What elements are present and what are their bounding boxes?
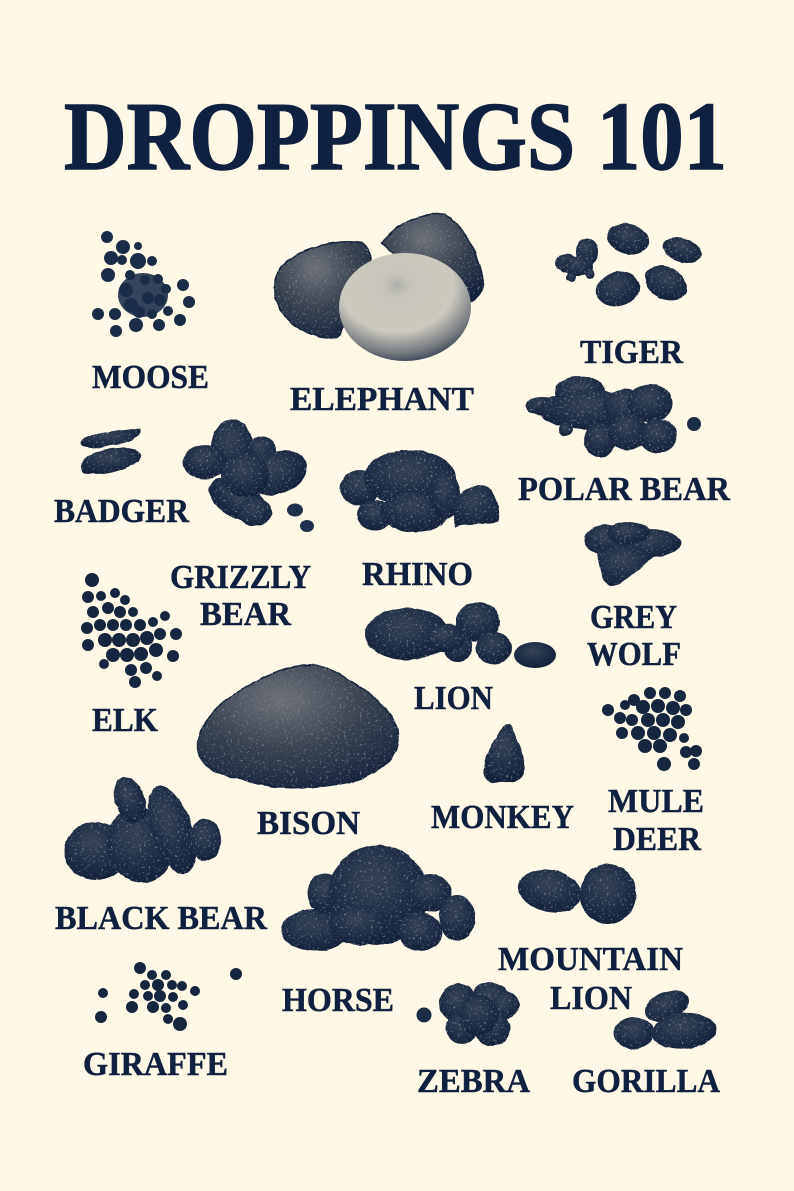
rhino label: RHINO xyxy=(362,556,473,593)
lion label: LION xyxy=(414,680,493,717)
elk label: ELK xyxy=(92,702,158,739)
polar bear droppings xyxy=(525,376,701,457)
grey wolf label: WOLF xyxy=(587,636,681,673)
zebra label: ZEBRA xyxy=(417,1063,530,1100)
monkey label: MONKEY xyxy=(431,799,574,836)
elephant droppings xyxy=(274,214,483,361)
mountain lion label xyxy=(498,941,683,1017)
giraffe label: GIRAFFE xyxy=(83,1046,228,1083)
bison droppings xyxy=(197,665,399,788)
bison label: BISON xyxy=(257,805,360,842)
grizzly bear label: BEAR xyxy=(200,596,291,633)
grizzly bear label xyxy=(170,559,311,633)
moose droppings xyxy=(92,231,195,337)
monkey droppings xyxy=(484,724,525,783)
mule deer label: DEER xyxy=(613,821,701,858)
horse label: HORSE xyxy=(282,982,394,1019)
badger label: BADGER xyxy=(54,493,189,530)
black bear label: BLACK BEAR xyxy=(55,900,267,937)
mountain lion label: MOUNTAIN xyxy=(498,941,683,978)
mule deer label: MULE xyxy=(608,783,704,820)
badger droppings xyxy=(80,428,141,474)
grizzly bear droppings xyxy=(183,419,314,532)
grizzly bear label: GRIZZLY xyxy=(170,559,311,596)
black bear droppings xyxy=(64,772,221,890)
zebra droppings xyxy=(416,982,519,1046)
mule deer droppings xyxy=(602,687,702,771)
title: DROPPINGS 101 xyxy=(64,83,727,190)
horse droppings xyxy=(281,845,475,951)
mountain lion droppings xyxy=(514,864,636,924)
lion droppings xyxy=(365,602,556,668)
mountain lion label: LION xyxy=(550,980,632,1017)
grey wolf droppings xyxy=(584,522,681,586)
gorilla label: GORILLA xyxy=(572,1063,720,1100)
grey wolf label xyxy=(587,599,681,673)
elephant label: ELEPHANT xyxy=(290,381,474,418)
polar bear label: POLAR BEAR xyxy=(518,471,730,508)
rhino droppings xyxy=(340,450,499,532)
tiger droppings xyxy=(555,219,705,311)
grey wolf label: GREY xyxy=(590,599,677,636)
elk droppings xyxy=(81,573,182,688)
mule deer label xyxy=(608,783,704,858)
giraffe droppings xyxy=(95,962,242,1031)
tiger label: TIGER xyxy=(580,334,683,371)
moose label: MOOSE xyxy=(92,359,209,396)
gorilla droppings xyxy=(614,984,717,1052)
